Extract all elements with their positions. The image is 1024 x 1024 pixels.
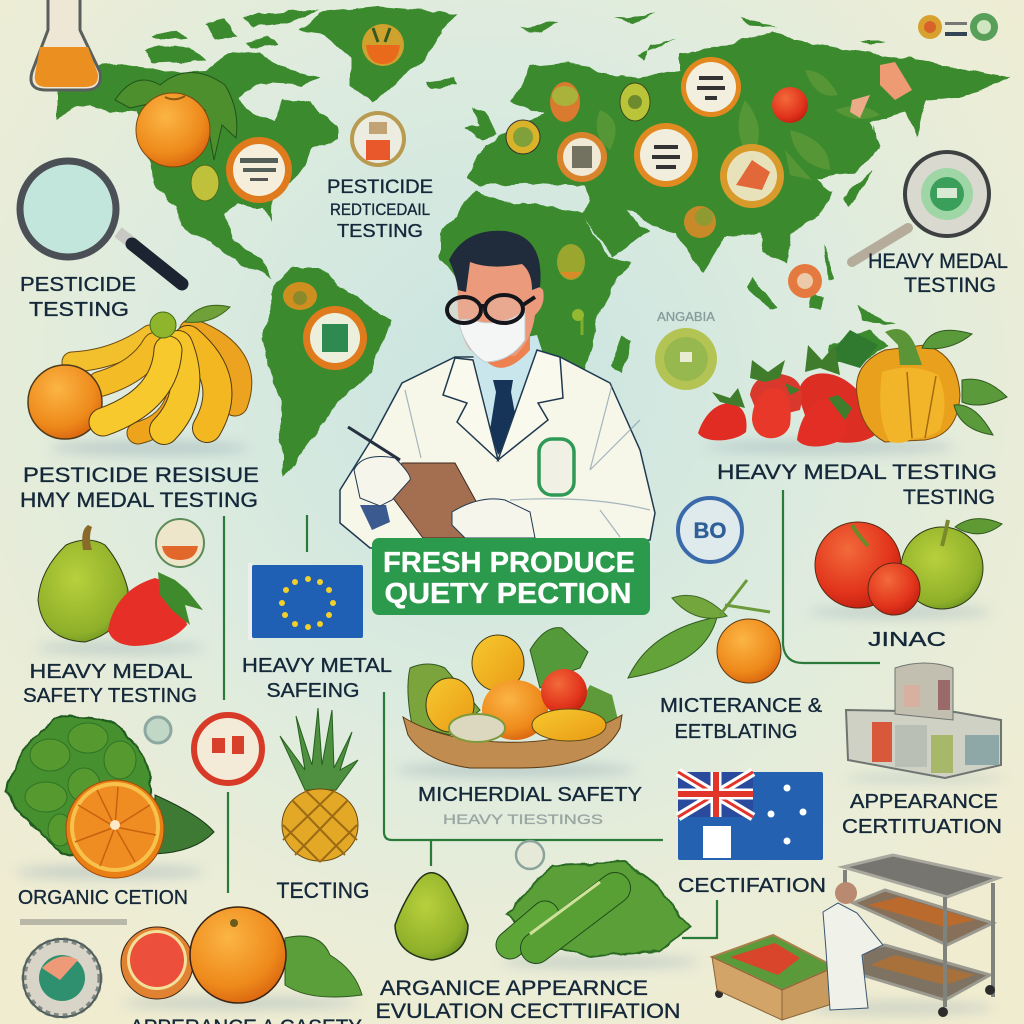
label: PESTICIDE RESISUE [23,464,259,487]
icon: Australian flag [678,772,823,860]
label: ORGANIC CETION [18,887,188,909]
map: eurasia [466,33,1010,273]
inspector [340,231,655,548]
label: JINAC [868,629,946,651]
connector lines [224,490,880,938]
rack top [843,855,998,897]
label: MICTERANCE & [660,695,823,717]
map: uk [465,108,497,140]
clipboard [393,463,477,538]
label: TESTING [904,274,996,297]
icon: orange with leaves [628,580,781,683]
label: MICHERDIAL SAFETY [418,784,642,806]
label: TECTING [276,878,370,903]
coat [340,357,655,548]
mask [458,310,525,362]
icon: worker with drying rack and crate [712,855,998,1020]
map badges [191,13,998,390]
icon: small round seal [516,841,544,869]
label: HEAVY MEDAL [868,250,1008,273]
map: iceland [427,78,457,90]
label: SAFEING [266,680,360,702]
map: south america [262,267,390,476]
label: HEAVY MEDAL TESTING [717,461,997,484]
map: australia [828,330,890,365]
gloves [360,505,390,530]
icon: EU flag [248,563,363,640]
rack wheels [715,985,995,1017]
label: CECTIFATION [678,875,826,897]
icon: pear [395,873,468,960]
label: REDTICEDAIL [330,200,430,219]
icon: round seal: BO [694,518,726,543]
label: EETBLATING [674,721,798,743]
labels [18,177,1008,1024]
map: madagascar [612,335,634,372]
lapels [443,350,563,460]
label: PESTICIDE [20,274,136,296]
icon: packaging shelf [845,663,1005,783]
title banner [372,538,650,615]
map: greenland [300,7,460,103]
label: SAFETY TESTING [23,685,197,707]
rack shelves [853,890,993,945]
icon: lettuce and citrus [8,715,214,879]
rack posts [845,870,993,1007]
icon: small seal [145,717,171,743]
label: HEAVY METAL [242,655,392,677]
icon: pineapple [280,708,358,862]
shirt and neck [473,335,545,455]
map: north america [56,52,338,278]
label: HEAVY MEDAL [30,661,192,683]
world map [56,7,1010,476]
icon: grapefruit, orange, leaf [120,907,362,1009]
pocket logo [539,439,574,495]
icon: fruit bowl [395,628,635,777]
icon: pear and strawberry [35,519,205,654]
label: TESTING [337,221,423,241]
icon: certification badge [23,939,101,1017]
map leaf texture [597,70,880,180]
sleeve lines [405,385,650,537]
label: HMY MEDAL TESTING [20,489,258,512]
label: PESTICIDE [327,177,433,198]
map: japan and sakhalin [843,125,880,206]
map: arctic islands [145,9,320,62]
pen [348,427,400,460]
map: southeast asia [748,243,896,323]
icon: tomato and apple [808,519,1002,618]
faint label: ANGABIA [657,309,715,324]
map: russian arctic [521,14,885,62]
ear and head [458,256,544,356]
glasses [447,295,535,323]
label: APPEARANCE [850,791,998,813]
faint label: HEAVY TIESTINGS [443,811,603,827]
icon: cucumbers and greens [500,862,700,968]
icon: red circle seal [194,715,262,783]
label: CERTITUATION [842,816,1002,838]
label: TESTING [29,299,129,321]
faint small caption [20,919,127,925]
icon: strawberries and pepper [698,329,1007,454]
icon: bananas and orange [28,305,250,455]
label: ARGANICE APPEARNCE [380,977,648,1000]
title text: QUETY PECTION [384,578,632,610]
icon: map orange with leaves [115,72,237,167]
title text [383,547,635,610]
hair [449,231,541,292]
worker [823,903,883,1010]
icon: round seal [678,498,742,562]
map: africa [441,192,630,380]
icon: magnifying glass left [20,161,182,284]
icon: flask [31,0,100,90]
label: EVULATION CECTTIIFATION [376,1000,680,1023]
icon: magnifying glass right [852,152,989,262]
tie [490,380,518,455]
title text: FRESH PRODUCE [383,547,635,579]
label: TESTING [903,486,995,509]
crate [712,935,835,990]
